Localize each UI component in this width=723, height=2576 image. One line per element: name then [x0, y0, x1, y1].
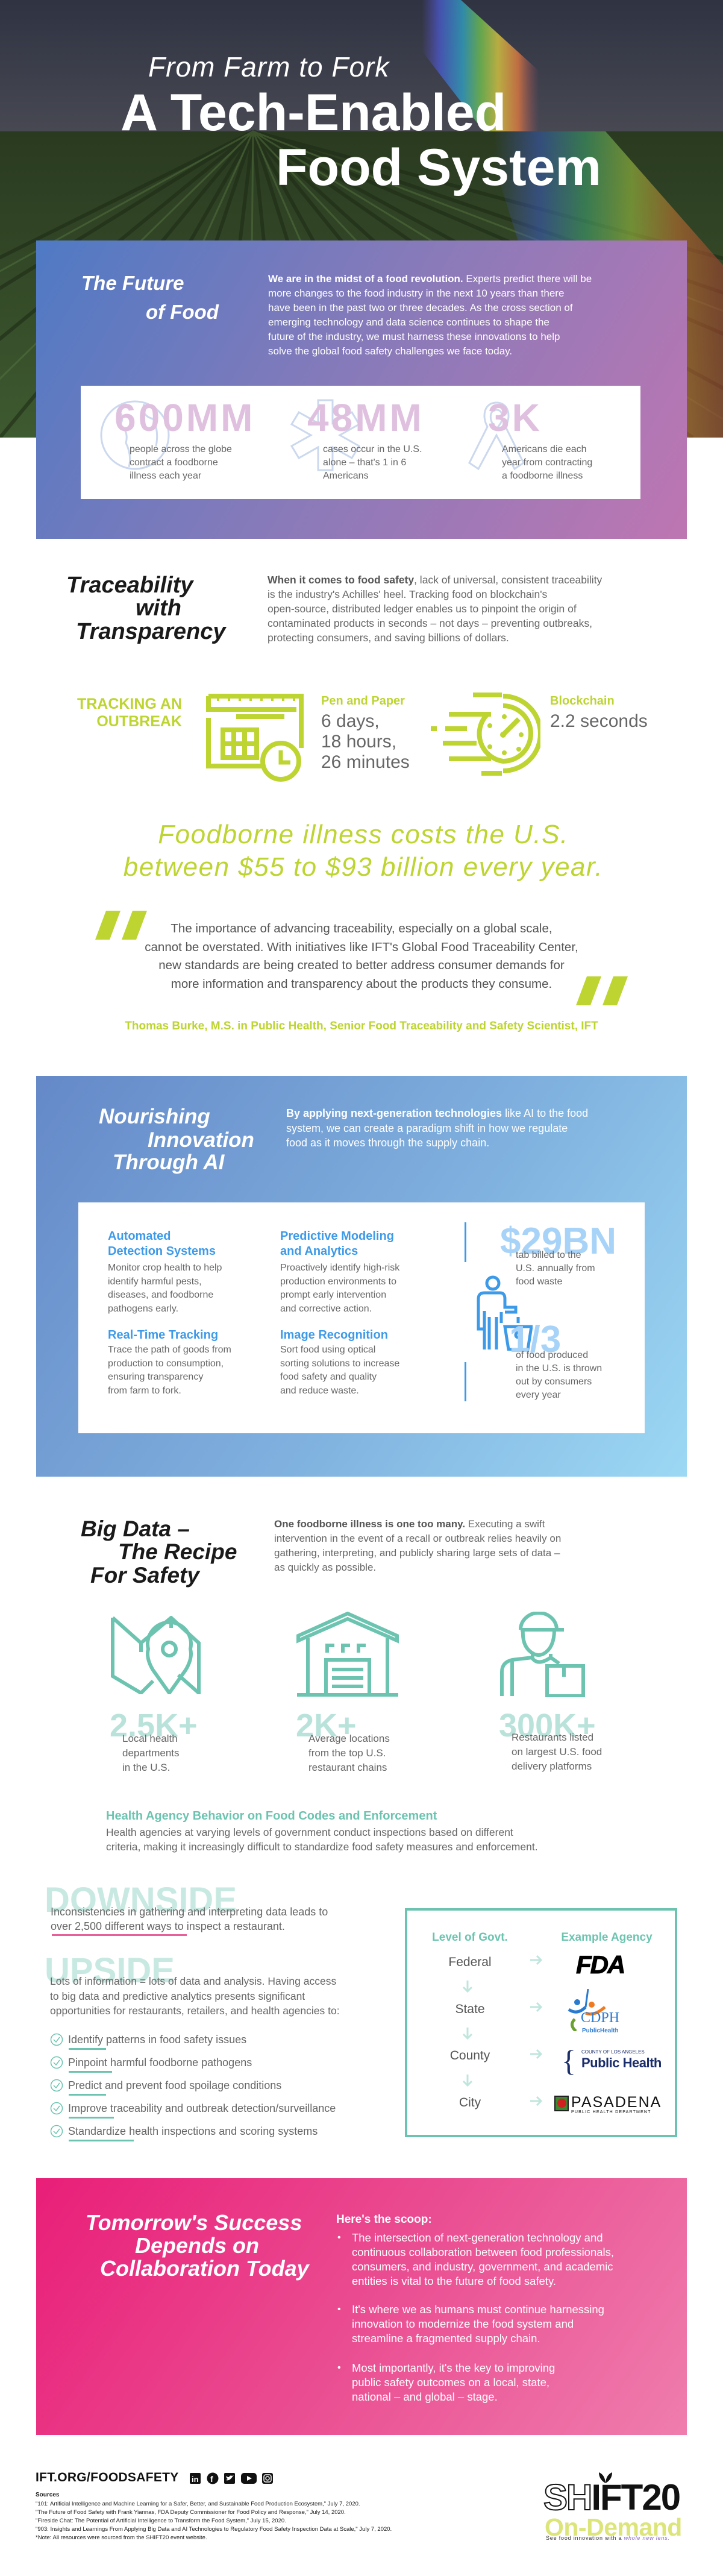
intro text: system, we can create a paradigm shift in how we regulate [286, 1122, 568, 1134]
panel: government levels and agencies [405, 1908, 677, 2137]
traceability text: When it comes to food safety, lack of universal, consistent traceability [268, 574, 602, 586]
checklist: Pinpoint harmful foodborne pathogens [68, 2056, 252, 2069]
stat: 1/3: 1/3 [509, 1319, 561, 1360]
intro text: emerging technology and data science continues to shape the [268, 316, 549, 328]
big data text: gathering, interpreting, and publicly sharing large sets of data – [274, 1547, 560, 1559]
heading: Innovation [148, 1128, 254, 1152]
item: automated detection: pathogens early. [108, 1303, 178, 1314]
quote text: more information and transparency about the products they consume. [171, 976, 552, 991]
description: delivery platforms [512, 1761, 592, 1772]
description: Americans [323, 471, 369, 481]
stat: $29BN: U.S. annually from [516, 1263, 595, 1274]
callout: cost of foodborne illness [124, 820, 603, 882]
description [308, 1732, 390, 1775]
item: real-time tracking [108, 1328, 231, 1396]
big data text [274, 1518, 561, 1573]
heading: Big Data - The Recipe For Safety: Big Data – [81, 1516, 190, 1541]
scoop list: consumers, and industry, government, and academic [352, 2260, 613, 2273]
upside block: opportunities for restaurants, retailers, and health agencies to: [50, 2005, 340, 2017]
upside block: to big data and predictive analytics presents significant [50, 1990, 305, 2002]
hero title [120, 51, 601, 196]
stat: 1/3 [509, 1319, 602, 1400]
description [323, 444, 422, 481]
item: automated detection: diseases, and foodborne [108, 1290, 213, 1300]
item: image recognition [280, 1328, 399, 1396]
downside block: DOWNSIDE [45, 1880, 237, 1920]
panel: nourishing innovation through AI [36, 1076, 687, 1477]
logo: LA County Public Health [562, 2046, 658, 2081]
icon: globe [100, 400, 170, 470]
description: on largest U.S. food [512, 1746, 602, 1758]
downside block [45, 1883, 382, 1938]
quote text: The importance of advancing traceability, especially on a global scale, [171, 922, 552, 935]
item: automated detection [108, 1230, 222, 1314]
item: predictive modeling: Proactively identify high-risk [280, 1263, 399, 1273]
scoop list: entities is vital to the future of food safety. [352, 2275, 556, 2287]
stat: delivery restaurants [498, 1610, 630, 1779]
footer: website and social icons: in [192, 2475, 199, 2484]
number: 48MM [307, 396, 424, 439]
stat: 600MM [100, 396, 255, 481]
title line 1: A Tech-Enabled [120, 84, 506, 142]
levels: County [450, 2049, 490, 2062]
icon: person with trash can [477, 1275, 533, 1351]
health agency behavior text: criteria, making it increasingly difficult to standardize food safety measures and enforcement. [106, 1841, 538, 1853]
heading: Nourishing [99, 1105, 210, 1128]
item: real-time tracking: production to consumption, [108, 1359, 224, 1368]
levels: Federal [448, 1955, 492, 1969]
description: Local health [122, 1733, 178, 1744]
item: image recognition: sorting solutions to increase [280, 1359, 399, 1368]
arrows: right [528, 1953, 546, 2109]
heading: The Future of Food [81, 272, 219, 323]
sources: Sources [36, 2492, 59, 2498]
item: automated detection: Monitor crop health to help [108, 1263, 222, 1273]
scoop list: It's where we as humans must continue harnessing [352, 2303, 604, 2316]
stat: local health departments [110, 1616, 201, 1773]
item: predictive modeling: Predictive Modeling [280, 1230, 394, 1243]
logo: FDA: FDA [576, 1950, 624, 1979]
scoop list: • [337, 2232, 341, 2243]
description: from the top U.S. [308, 1747, 386, 1759]
traceability text: contaminated products in seconds – not days – preventing outbreaks, [268, 617, 592, 629]
item: image recognition: Sort food using optical [280, 1345, 375, 1355]
pen and paper [321, 694, 410, 772]
item: image recognition: and reduce waste. [280, 1385, 359, 1396]
heading: The Future of Food: The Future [81, 272, 184, 294]
description: alone – that's 1 in 6 [323, 457, 406, 468]
intro text: more changes to the food industry in the next 10 years than there [268, 287, 564, 299]
sources: "903: Insights and Learnings From Applying Big Data and AI Technologies to Regulatory Food Safety Inspection Data at Scale," July 7, 2020. [36, 2526, 392, 2533]
scoop list: streamline a fragmented supply chain. [352, 2332, 540, 2345]
attribution: Thomas Burke, M.S. in Public Health, Senior Food Traceability and Safety Scientist, IFT [125, 1020, 598, 1032]
callout: cost of foodborne illness: Foodborne illness costs the U.S. [158, 820, 569, 849]
description: Average locations [308, 1733, 390, 1744]
number: 3K [488, 396, 542, 439]
blockchain: Blockchain [550, 694, 615, 708]
panel: the future of food [36, 240, 687, 539]
sources: "The Future of Food Safety with Frank Yiannas, FDA Deputy Commissioner for Food Policy and Response," July 14, 2020. [36, 2509, 346, 2516]
logo: Pasadena [554, 2094, 663, 2119]
logo: Pasadena: PUBLIC HEALTH DEPARTMENT [571, 2110, 651, 2114]
icon: medical star [290, 399, 360, 471]
logo: LA County Public Health: { [562, 2044, 576, 2078]
icon: building [296, 1612, 399, 1697]
icon: open quote marks [95, 911, 147, 940]
big data text: as quickly as possible. [274, 1562, 376, 1573]
icon: fast stopwatch [431, 693, 540, 776]
checklist: Improve traceability and outbreak detection/surveillance [68, 2102, 336, 2114]
number: 2.5K+ [110, 1707, 198, 1744]
logo: SHIFT20 On-Demand [543, 2471, 688, 2543]
stat: 1/3: of food produced [516, 1350, 588, 1360]
scoop list: public safety outcomes on a local, state, [352, 2376, 549, 2389]
item: predictive modeling: and corrective action. [280, 1303, 372, 1314]
panel: collaboration [36, 2178, 687, 2435]
pen and paper: Pen and Paper [321, 694, 405, 708]
logo: Pasadena: PASADENA [571, 2094, 662, 2111]
stat: $29BN: food waste [516, 1277, 562, 1287]
stat: $29BN: $29BN [500, 1220, 616, 1262]
item: automated detection: Automated [108, 1230, 171, 1243]
white content box [78, 1202, 645, 1433]
sources: "101: Artificial Intelligence and Machine Learning for a Safer, Better, and Sustainable Food Production Ecosystem," July 7, 2020. [36, 2501, 360, 2507]
label: tracking an outbreak [77, 696, 182, 730]
description [502, 444, 592, 481]
sources: "Fireside Chat: The Potential of Artificial Intelligence to Transform the Food System," July 15, 2020. [36, 2518, 286, 2524]
stats box [81, 386, 640, 499]
logo: SHIFT20 On-Demand: See food innovation with a whole new lens. [546, 2535, 670, 2541]
scoop list: Here's the scoop: [336, 2213, 432, 2226]
item: real-time tracking: Real-Time Tracking [108, 1328, 218, 1342]
description: cases occur in the U.S. [323, 444, 422, 454]
icon: delivery person [500, 1612, 586, 1697]
footer: website and social icons: IFT.ORG/FOODSAFETY [36, 2471, 179, 2484]
traceability text: is the industry's Achilles' heel. Tracking food on blockchain's [268, 588, 547, 600]
intro text [268, 273, 592, 357]
pen and paper: 18 hours, [321, 732, 396, 752]
heading: Traceability with Transparency: Transparency [76, 619, 226, 644]
item: predictive modeling: and Analytics [280, 1245, 358, 1258]
heading: Collaboration Today [100, 2256, 309, 2281]
item: image recognition: Image Recognition [280, 1328, 388, 1342]
pen and paper: 26 minutes [321, 752, 410, 772]
panel: government levels and agencies: Example Agency [561, 1931, 653, 1944]
blockchain: 2.2 seconds [550, 711, 648, 731]
intro text: We are in the midst of a food revolution. Experts predict there will be [268, 273, 592, 284]
upside block: Lots of information = lots of data and analysis. Having access [50, 1975, 336, 1987]
levels [437, 1955, 503, 2124]
big data text: intervention in the event of a recall or outbreak relies heavily on [274, 1533, 561, 1544]
heading: Traceability with Transparency [66, 573, 227, 644]
description [512, 1730, 602, 1774]
stat: 1/3: out by consumers [516, 1377, 592, 1387]
title line 2: Food System [276, 139, 601, 196]
description: contract a foodborne [130, 457, 218, 468]
downside block: Inconsistencies in gathering and interpreting data leads to [51, 1906, 328, 1918]
checklist: Predict and prevent food spoilage conditions [68, 2079, 281, 2091]
sources [36, 2491, 457, 2543]
quote text: cannot be overstated. With initiatives like IFT's Global Food Traceability Center, [145, 940, 578, 953]
description [122, 1733, 180, 1773]
scoop list [336, 2212, 662, 2393]
icon: close quote marks [576, 976, 628, 1005]
stat: 3K [468, 396, 592, 481]
tracking an outbreak row [77, 693, 648, 782]
icon: ribbon [468, 401, 524, 470]
intro text: solve the global food safety challenges we face today. [268, 345, 512, 357]
stat: $29BN [500, 1220, 616, 1287]
heading: Traceability with Transparency: Traceability [66, 573, 193, 598]
panel: collaboration: national – and global – stage. [352, 2390, 498, 2403]
footer: website and social icons: f [210, 2474, 213, 2484]
number: 600MM [114, 396, 255, 439]
item: real-time tracking: from farm to fork. [108, 1385, 181, 1396]
description: people across the globe [130, 444, 232, 454]
logo: SHIFT20 On-Demand: On-Demand [545, 2513, 682, 2541]
item: automated detection: Detection Systems [108, 1245, 216, 1258]
description: Restaurants listed [512, 1732, 593, 1743]
item: real-time tracking: ensuring transparency [108, 1372, 203, 1382]
logo: LA County Public Health: Public Health [581, 2055, 662, 2070]
item: predictive modeling [280, 1230, 400, 1314]
heading: Big Data - The Recipe For Safety [81, 1516, 237, 1588]
stat: $29BN: tab billed to the [516, 1250, 581, 1260]
levels: City [459, 2096, 481, 2109]
traceability text: open-source, distributed ledger enables us to pinpoint the origin of [268, 603, 577, 615]
scoop list: The intersection of next-generation technology and [352, 2231, 603, 2244]
checklist: Identify patterns in food safety issues [68, 2034, 246, 2046]
column headers: Level of Govt. [432, 1931, 508, 1944]
heading: Big Data - The Recipe For Safety: The Recipe [118, 1539, 237, 1564]
description: in the U.S. [122, 1762, 170, 1773]
intro text: By applying next-generation technologies like AI to the food [286, 1107, 588, 1119]
description: departments [122, 1747, 180, 1759]
heading: Depends on [135, 2233, 259, 2258]
icon: map pin [111, 1616, 201, 1694]
heading: Big Data - The Recipe For Safety: For Safety [90, 1563, 199, 1588]
health agency behavior text: Health agencies at varying levels of government conduct inspections based on different [106, 1826, 513, 1838]
quote text [145, 922, 578, 991]
item: predictive modeling: production environments to [280, 1277, 396, 1286]
intro text: have been in the past two or three decades. As the cross section of [268, 302, 573, 313]
item: image recognition: food safety and quality [280, 1372, 377, 1382]
logo: SHIFT20 On-Demand: SHIFT20 [543, 2477, 680, 2518]
icon: calendar with clock [206, 694, 304, 782]
intro text: food as it moves through the supply chain. [286, 1137, 489, 1149]
item: automated detection: identify harmful pests, [108, 1277, 202, 1286]
quote text: new standards are being created to better address consumer demands for [158, 958, 565, 972]
heading [99, 1105, 254, 1174]
health agency behavior text [106, 1808, 624, 1855]
big data text: One foodborne illness is one too many. Executing a swift [274, 1518, 545, 1530]
footer: website and social icons [36, 2469, 283, 2486]
number: 300K+ [499, 1707, 596, 1744]
stat: restaurant locations [295, 1610, 415, 1779]
logo: LA County Public Health: COUNTY OF LOS ANGELES [581, 2049, 645, 2055]
heading: Tomorrow's Success [86, 2210, 302, 2235]
subtitle: From Farm to Fork: From Farm to Fork [148, 51, 389, 83]
scoop list: • [337, 2304, 341, 2314]
sources: *Note: All resources were sourced from the SHIFT20 event website. [36, 2534, 207, 2541]
traceability text: protecting consumers, and saving billions of dollars. [268, 632, 509, 644]
description: restaurant chains [308, 1762, 387, 1773]
heading: Through AI [113, 1151, 224, 1174]
scoop list: Most importantly, it's the key to improving [352, 2361, 555, 2374]
description: illness each year [130, 471, 201, 481]
logo: CDPH: CDPH [581, 2010, 619, 2026]
stat: 1/3: in the U.S. is thrown [516, 1363, 602, 1374]
quote block [95, 911, 628, 1032]
scoop list: continuous collaboration between food professionals, [352, 2246, 614, 2258]
scoop list: • [337, 2363, 341, 2373]
item: real-time tracking: Trace the path of goods from [108, 1345, 231, 1355]
number: 2K+ [296, 1707, 357, 1744]
scoop list: innovation to modernize the food system and [352, 2317, 574, 2330]
checklist: Standardize health inspections and scoring systems [68, 2125, 318, 2137]
item: predictive modeling: prompt early intervention [280, 1290, 386, 1300]
heading: Traceability with Transparency: with [136, 595, 181, 621]
intro text [286, 1107, 588, 1149]
blockchain [550, 694, 648, 731]
levels: State [455, 2002, 485, 2016]
stat: 48MM [290, 396, 424, 481]
logo: CDPH [568, 1989, 628, 2036]
downside block: over 2,500 different ways to inspect a restaurant. [51, 1920, 285, 1932]
arrows: down [462, 1971, 480, 2091]
hero background: farm field with rainbow [0, 0, 723, 438]
heading [84, 2211, 307, 2284]
label: tracking an outbreak: TRACKING AN [77, 696, 182, 712]
traceability text [268, 574, 602, 644]
pen and paper: 6 days, [321, 711, 380, 731]
upside block: UPSIDE [45, 1951, 175, 1990]
intro text: future of the industry, we must harness these innovations to help [268, 331, 560, 342]
label: tracking an outbreak: OUTBREAK [96, 713, 182, 730]
upside block [45, 1953, 394, 2020]
description: year from contracting [502, 457, 592, 468]
callout: cost of foodborne illness: between $55 to $93 billion every year. [124, 852, 603, 882]
description: a foodborne illness [502, 471, 583, 481]
description: Americans die each [502, 444, 587, 454]
checklist [50, 2031, 387, 2143]
description [130, 444, 232, 481]
stat: 1/3: every year [516, 1390, 561, 1400]
health agency behavior text: Health Agency Behavior on Food Codes and Enforcement [106, 1809, 437, 1823]
heading: The Future of Food: of Food [146, 301, 219, 323]
logo: CDPH: PublicHealth [582, 2028, 619, 2034]
